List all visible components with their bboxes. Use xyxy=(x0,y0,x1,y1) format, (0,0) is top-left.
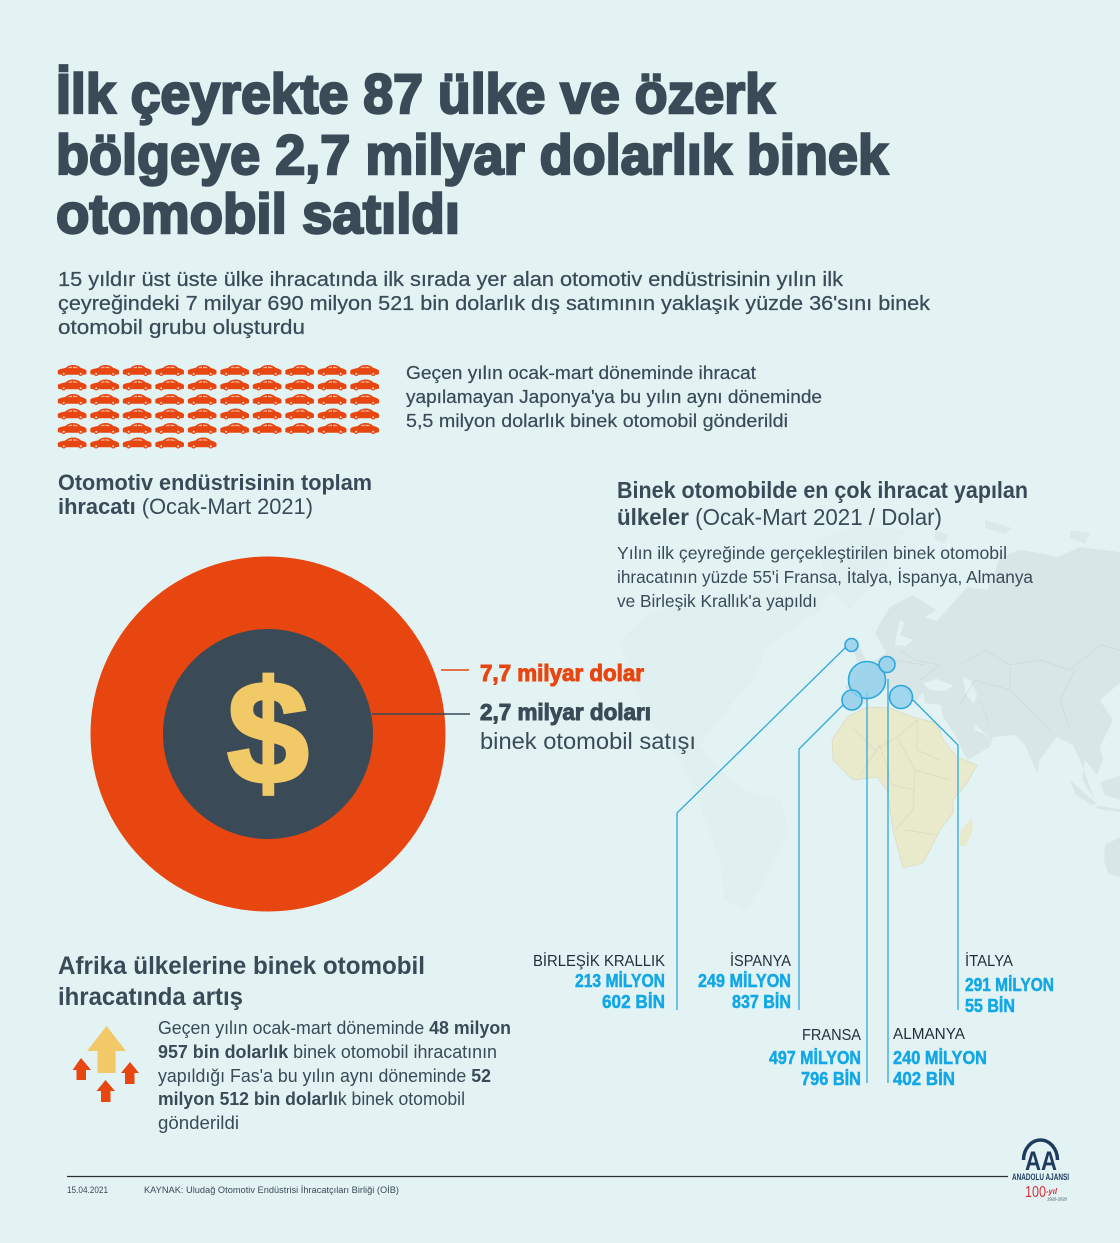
source: KAYNAK: Uludağ Otomotiv Endüstrisi İhracatçıları Birliği (OİB) xyxy=(144,1185,399,1195)
callout: passenger car sales: binek otomobil satışı xyxy=(480,728,696,754)
map: Southeast Asia islands xyxy=(1070,776,1120,812)
label: Fransa xyxy=(769,1027,861,1089)
logo: Anadolu Ajansı xyxy=(1012,1140,1069,1202)
intro paragraph xyxy=(58,269,931,339)
label: İtalya: 291 MİLYON xyxy=(965,974,1054,995)
date: 15.04.2021 xyxy=(67,1185,108,1195)
map: Madagascar xyxy=(959,818,973,846)
label: İspanya xyxy=(698,951,791,1012)
map: Eurasia xyxy=(841,547,1120,800)
label: Birleşik Krallık: BİRLEŞİK KRALLIK xyxy=(533,951,665,970)
label: Almanya xyxy=(893,1026,987,1089)
title: İlk çeyrekte 87 ülke ve özerk xyxy=(56,62,776,125)
icon: rising arrows xyxy=(72,1026,139,1102)
title: bölgeye 2,7 milyar dolarlık binek xyxy=(56,123,889,186)
Japan text block: 5,5 milyon dolarlık binek otomobil gönderildi xyxy=(406,411,788,431)
intro paragraph: otomobil grubu oluşturdu xyxy=(58,317,305,339)
countries paragraph: Yılın ilk çeyreğinde gerçekleştirilen binek otomobil xyxy=(617,543,1007,563)
callout: total value: 7,7 milyar dolar xyxy=(480,660,644,686)
heading: Africa: ihracatında artış xyxy=(58,983,243,1011)
logo: Anadolu Ajansı: -yıl xyxy=(1046,1187,1058,1196)
logo: Anadolu Ajansı: 1920-2020 xyxy=(1047,1196,1067,1202)
label: Almanya: 402 BİN xyxy=(893,1068,955,1089)
label: Birleşik Krallık: 213 MİLYON xyxy=(575,970,665,991)
label: İtalya: İTALYA xyxy=(965,951,1013,970)
world map xyxy=(620,520,1120,910)
Africa paragraph: 957 bin dolarlık binek otomobil ihracatının xyxy=(158,1042,497,1062)
label: Fransa: FRANSA xyxy=(802,1027,861,1044)
country bubbles xyxy=(842,638,912,710)
callout: passenger car sales: 2,7 milyar doları xyxy=(480,699,651,725)
map: faint Greenland xyxy=(815,525,905,610)
title: otomobil satıldı xyxy=(56,182,460,245)
heading: total automotive exports: ihracatı (Ocak-Mart 2021) xyxy=(58,494,313,519)
Africa paragraph xyxy=(158,1018,511,1133)
intro paragraph: 15 yıldır üst üste ülke ihracatında ilk sırada yer alan otomotiv endüstrisinin yılın ilk xyxy=(58,269,844,291)
logo: Anadolu Ajansı: ANADOLU AJANSI xyxy=(1012,1172,1069,1182)
Africa paragraph: gönderildi xyxy=(158,1113,239,1133)
Japan text block: yapılamayan Japonya'ya bu yılın aynı döneminde xyxy=(406,387,822,407)
Africa paragraph: Geçen yılın ocak-mart döneminde 48 milyon xyxy=(158,1018,511,1038)
heading: top export countries: ülkeler (Ocak-Mart 2021 / Dolar) xyxy=(617,504,942,530)
intro paragraph: çeyreğindeki 7 milyar 690 milyon 521 bin dolarlık dış satımının yaklaşık yüzde 36'sını binek xyxy=(58,293,931,315)
label: İspanya: 837 BİN xyxy=(732,991,791,1012)
map: Africa xyxy=(832,707,977,868)
map: Australia xyxy=(1104,837,1120,877)
logo: Anadolu Ajansı: 100 xyxy=(1025,1184,1046,1201)
Africa paragraph: yapıldığı Fas'a bu yılın aynı döneminde 52 xyxy=(158,1066,491,1086)
title xyxy=(56,62,889,245)
heading: top export countries: Binek otomobilde en çok ihracat yapılan xyxy=(617,477,1028,503)
logo: Anadolu Ajansı: AA xyxy=(1025,1146,1057,1176)
icon: dollar sign: $ xyxy=(227,651,309,814)
heading: top export countries xyxy=(617,477,1028,530)
donut chart with dollar icon xyxy=(90,556,446,912)
map: faint Americas xyxy=(620,580,830,910)
heading: total automotive exports xyxy=(58,470,372,519)
icon grid: 55 cars xyxy=(58,365,379,448)
map: African borders xyxy=(853,720,950,835)
label: İspanya: İSPANYA xyxy=(730,951,791,970)
footer rule xyxy=(67,1176,1008,1178)
label: Fransa: 497 MİLYON xyxy=(769,1047,861,1068)
map: British Isles xyxy=(854,640,866,663)
map: Eurasian borders xyxy=(893,645,1120,730)
countries paragraph xyxy=(617,543,1033,611)
countries paragraph: ve Birleşik Krallık'a yapıldı xyxy=(617,591,817,611)
label: İtalya: 55 BİN xyxy=(965,995,1015,1016)
Japan text block xyxy=(406,363,822,431)
countries paragraph: ihracatının yüzde 55'i Fransa, İtalya, İspanya, Almanya xyxy=(617,567,1033,587)
heading: Africa: Afrika ülkelerine binek otomobil xyxy=(58,952,425,980)
label: Fransa: 796 BİN xyxy=(801,1068,861,1089)
map: inland seas xyxy=(895,620,990,737)
heading: Africa xyxy=(58,952,425,1011)
label: Birleşik Krallık xyxy=(533,951,665,1012)
label: İspanya: 249 MİLYON xyxy=(698,970,791,991)
callout: passenger car sales xyxy=(372,699,696,754)
connector lines xyxy=(677,647,958,1083)
Africa paragraph: milyon 512 bin dolarlık binek otomobil xyxy=(158,1089,465,1109)
label: İtalya xyxy=(965,951,1054,1016)
label: Almanya: 240 MİLYON xyxy=(893,1047,987,1068)
map: Arctic islands xyxy=(935,520,1090,544)
label: Birleşik Krallık: 602 BİN xyxy=(602,991,665,1012)
Japan text block: Geçen yılın ocak-mart döneminde ihracat xyxy=(406,363,756,383)
label: Almanya: ALMANYA xyxy=(893,1026,965,1043)
heading: total automotive exports: Otomotiv endüstrisinin toplam xyxy=(58,470,372,495)
